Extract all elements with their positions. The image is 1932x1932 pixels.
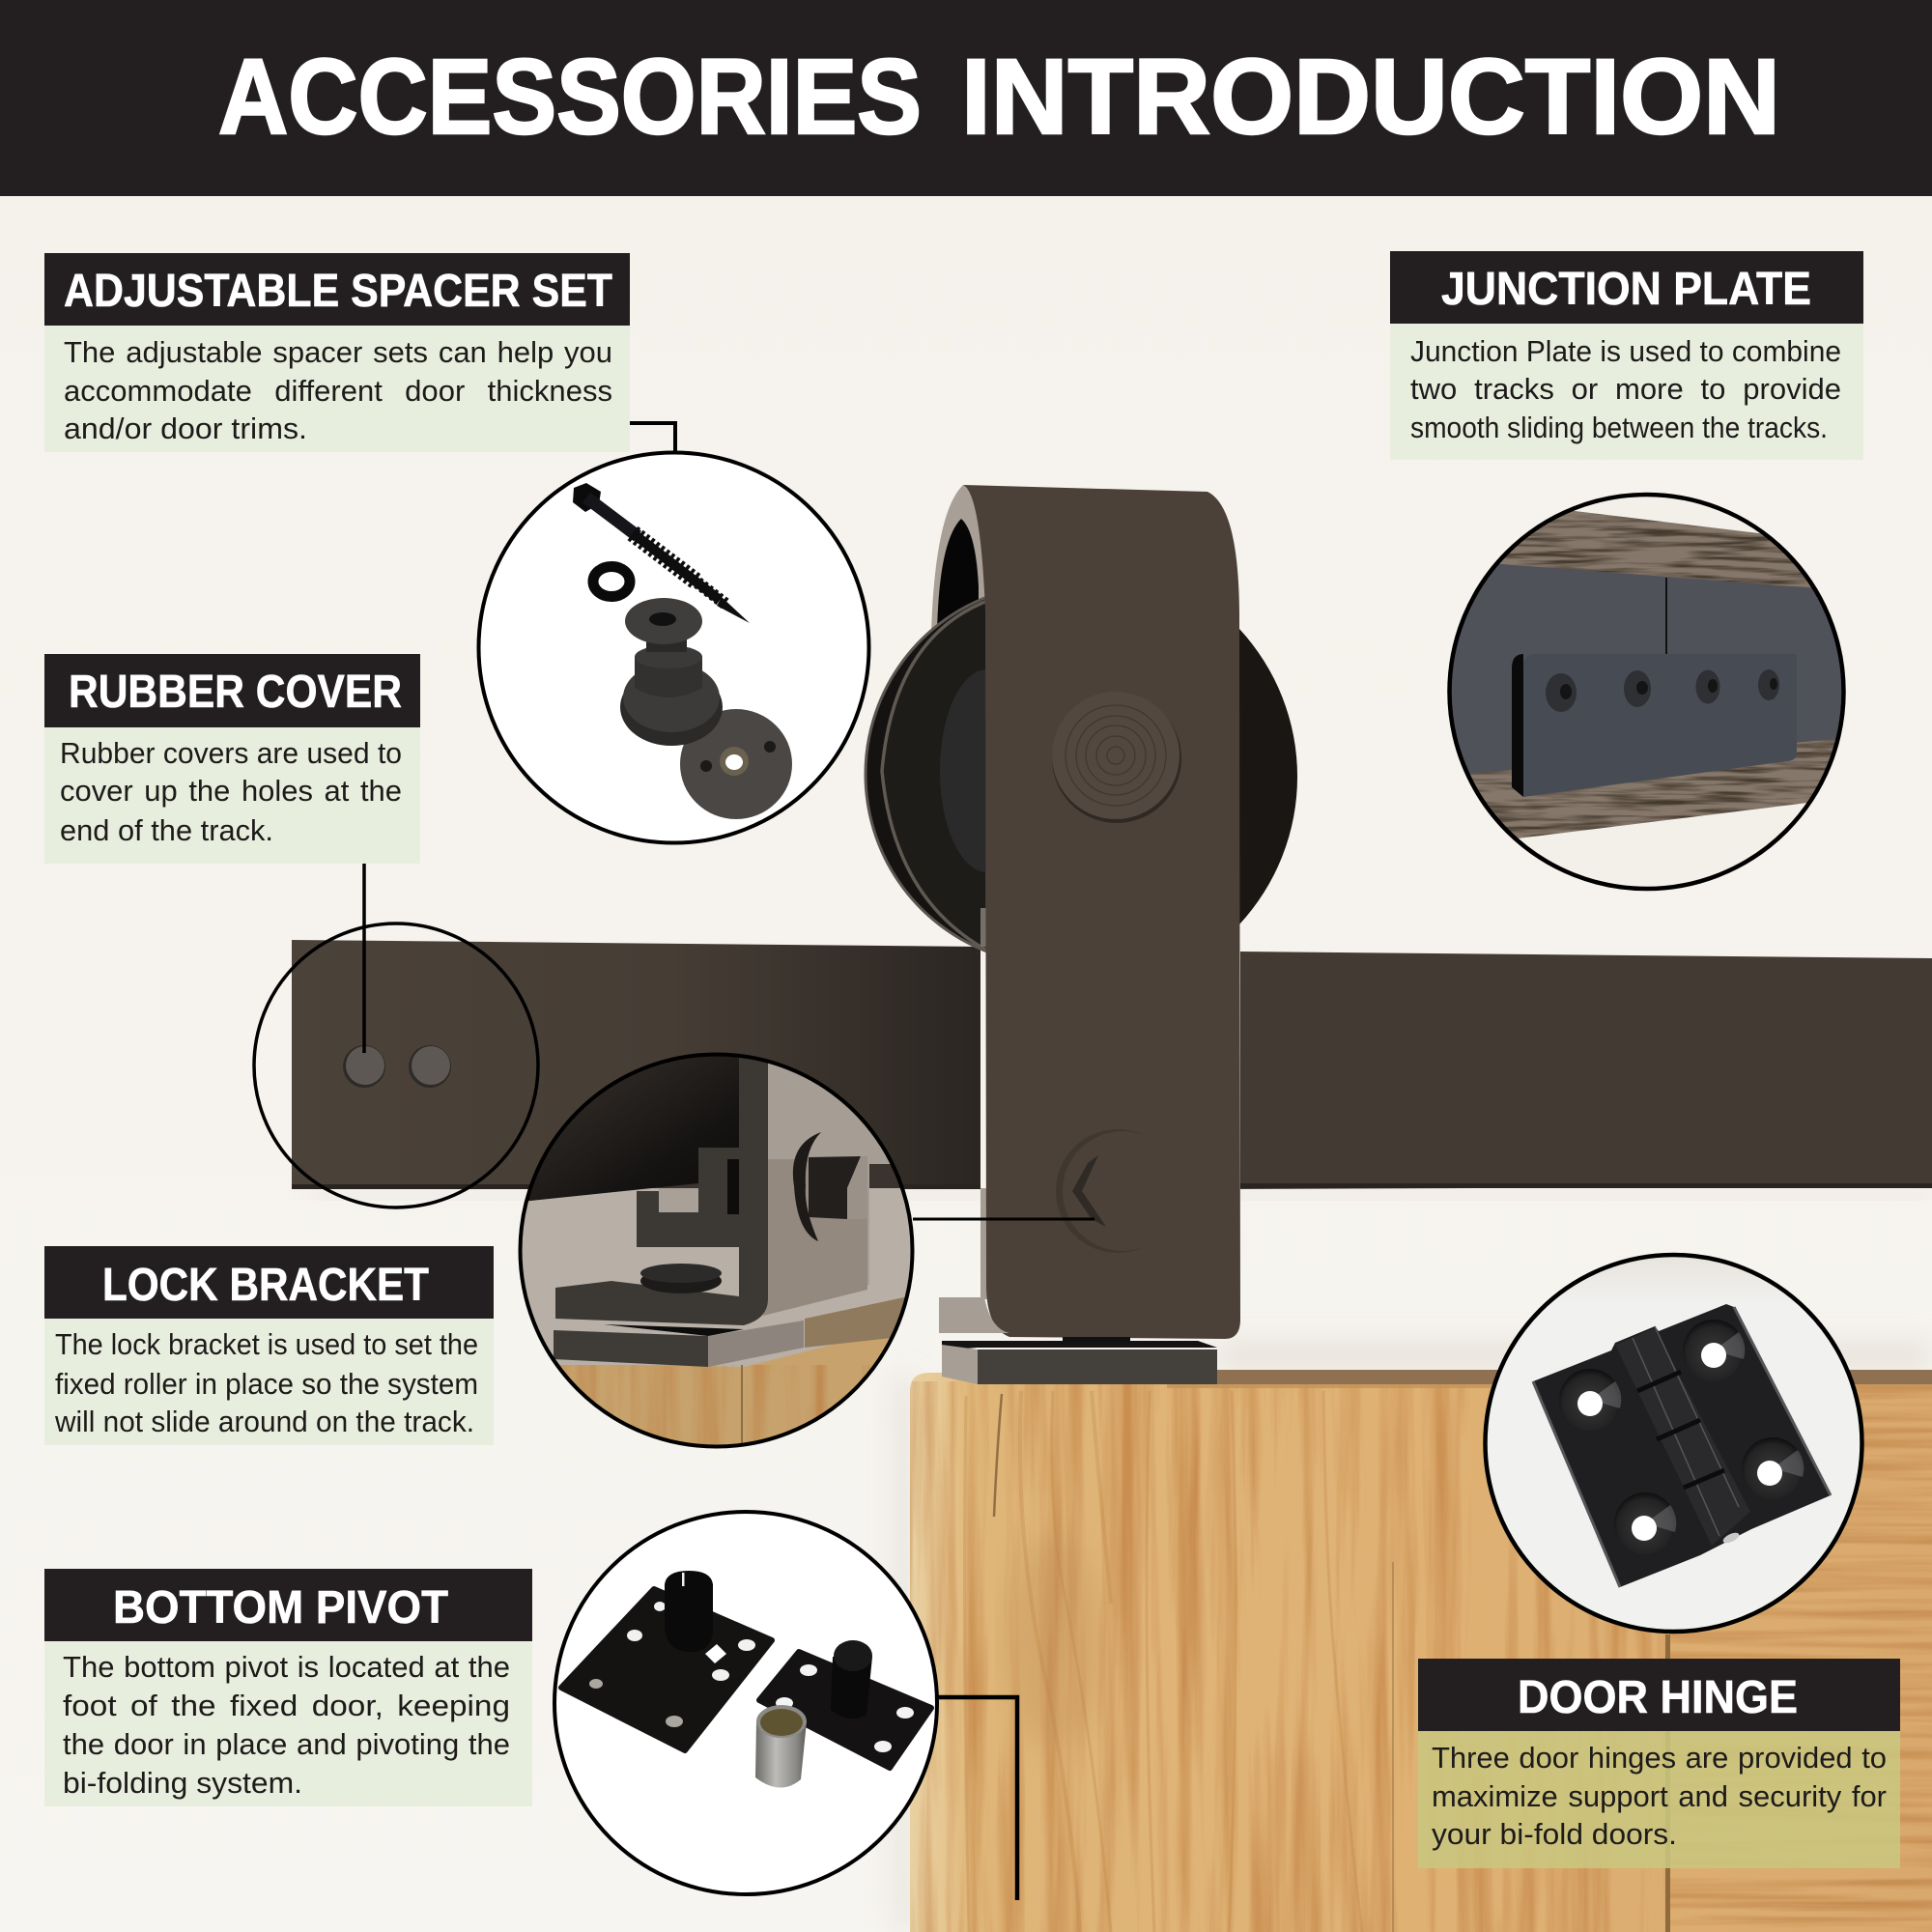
title bar (0, 0, 1932, 196)
title: INTRODUCTION (961, 38, 1780, 156)
hinge body (1533, 1304, 1831, 1587)
panel: bottom pivot (44, 1569, 532, 1806)
icon: metal sleeve (755, 1705, 807, 1788)
panel: lock bracket detail circle (522, 1057, 910, 1445)
text block: smooth sliding between the tracks. (1410, 411, 1828, 444)
text block: two tracks or more to provide (1410, 372, 1841, 406)
bottom bracket flange (939, 1285, 1217, 1384)
heading: DOOR HINGE (1518, 1672, 1798, 1723)
panel: bottom pivot detail circle (554, 1512, 937, 1894)
text block: The adjustable spacer sets can help you (64, 335, 612, 369)
leader lines (364, 423, 1094, 1900)
text block: accommodate different door thickness (64, 374, 612, 408)
screws (1546, 669, 1779, 712)
text block (1410, 334, 1841, 444)
text block: and/or door trims. (64, 412, 307, 445)
heading: ADJUSTABLE SPACER SET (64, 266, 612, 317)
wall shadow around door (896, 1343, 1932, 1932)
icon: back plate (680, 709, 792, 819)
heading: JUNCTION PLATE (1441, 264, 1811, 315)
track segment (1439, 559, 1855, 778)
panel: junction plate (1390, 251, 1863, 460)
text block: fixed roller in place so the system (55, 1367, 478, 1401)
text block (63, 1650, 510, 1800)
icon: spool spacer (620, 598, 723, 746)
heading (44, 1246, 494, 1319)
heading: RUBBER COVER (69, 667, 402, 718)
text block (60, 736, 402, 847)
roller hanger strap (963, 485, 1240, 1339)
lower hex bolt (1056, 1129, 1182, 1253)
panel: door hinge (1418, 1659, 1900, 1868)
panel: spacer set detail circle (479, 452, 869, 842)
bolt cap (1052, 692, 1181, 823)
text block: Junction Plate is used to combine (1410, 334, 1841, 368)
text block: cover up the holes at the (60, 774, 402, 808)
icon: rubber cover left (343, 1045, 385, 1088)
heading (44, 253, 630, 326)
track shadow (309, 1190, 1932, 1200)
junction plate (1512, 654, 1797, 797)
wooden door (910, 1368, 1932, 1932)
title: ACCESSORIES (218, 38, 922, 156)
text block: The lock bracket is used to set the (55, 1327, 478, 1361)
icon: square pivot plate (561, 1571, 772, 1750)
panel: rubber cover (44, 654, 420, 864)
text block (54, 1327, 478, 1438)
icon: rectangular pivot plate (759, 1640, 931, 1768)
text block: end of the track. (60, 813, 273, 847)
heading: LOCK BRACKET (102, 1260, 429, 1311)
text block: Three door hinges are provided to (1432, 1741, 1887, 1775)
text block: will not slide around on the track. (54, 1405, 474, 1438)
heading (44, 1569, 532, 1641)
text block: foot of the fixed door, keeping (63, 1689, 510, 1722)
text block: The bottom pivot is located at the (63, 1650, 510, 1684)
panel: lock bracket (44, 1246, 494, 1445)
icon: rubber cover right (409, 1045, 451, 1088)
panel: adjustable spacer set (44, 253, 630, 452)
panel: door hinge detail circle (1478, 1251, 1874, 1632)
icon: washer (593, 566, 630, 597)
text block (1432, 1741, 1887, 1851)
roller wheel (866, 485, 1297, 952)
text block: the door in place and pivoting the (63, 1727, 510, 1761)
heading (1390, 251, 1863, 324)
heading (44, 654, 420, 727)
heading (1418, 1659, 1900, 1731)
text block: maximize support and security for (1432, 1779, 1887, 1813)
icon: lag screw (573, 483, 750, 623)
barn door track (292, 940, 1932, 1189)
circle outline: lock bracket (520, 1055, 912, 1447)
text block: your bi-fold doors. (1432, 1817, 1677, 1851)
rubber cover detail circle (254, 923, 538, 1208)
text block (64, 335, 612, 445)
wood beam (1470, 510, 1835, 838)
text block: Rubber covers are used to (60, 736, 402, 770)
text block: bi-folding system. (63, 1766, 302, 1800)
heading: BOTTOM PIVOT (113, 1582, 448, 1634)
panel: junction plate detail circle (1439, 495, 1855, 889)
